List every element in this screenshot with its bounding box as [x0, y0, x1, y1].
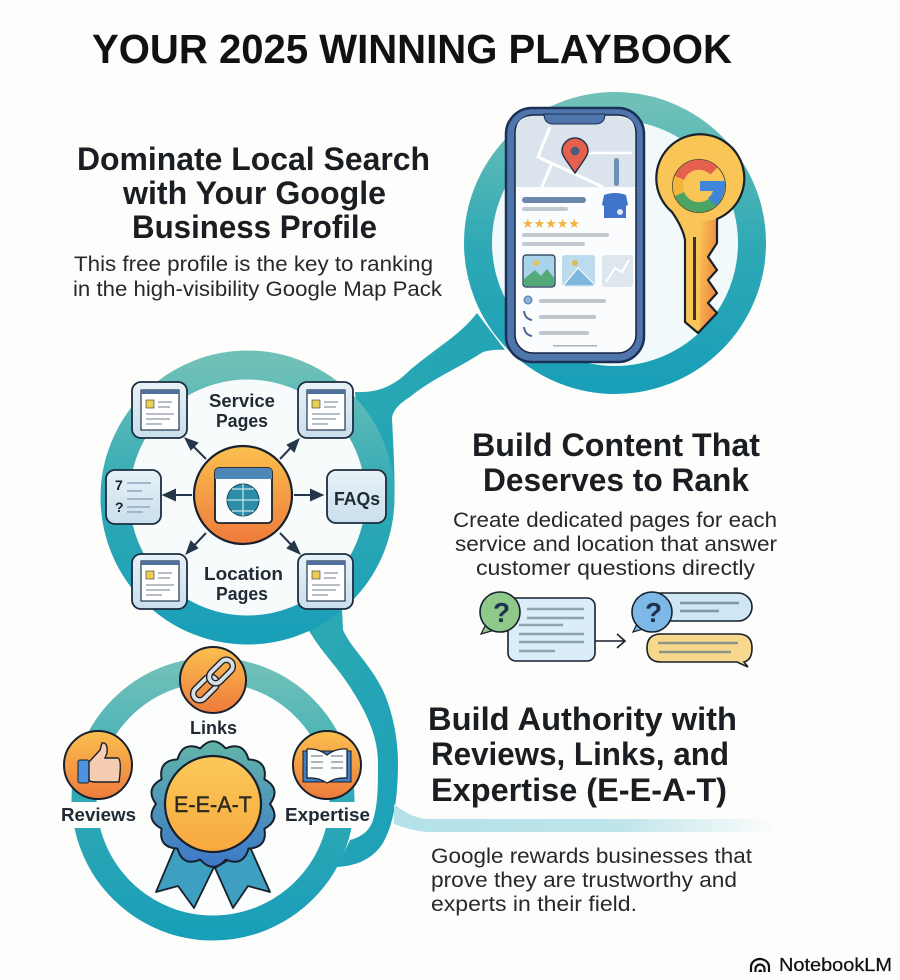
- question document: [480, 592, 595, 661]
- panel: middle ring content hub: [106, 365, 386, 630]
- text: content description: customer questions directly: [476, 557, 756, 580]
- icon: links badge: [180, 647, 246, 713]
- icon: storefront: [602, 193, 628, 218]
- label: location pages: Pages: [216, 584, 268, 604]
- listing text lines: [522, 197, 609, 246]
- phone notch: [544, 114, 605, 124]
- contact rows: [524, 296, 606, 346]
- icon: E-E-A-T rosette: E-E-A-T: [174, 792, 252, 817]
- icon: smartphone with business profile: [506, 108, 644, 362]
- icon: expertise book: [293, 731, 361, 799]
- heading: build authority: [428, 701, 737, 808]
- heading: dominate local search: Business Profile: [132, 209, 377, 245]
- heading: build content: Deserves to Rank: [483, 462, 749, 498]
- answer bubbles: ?: [645, 597, 662, 628]
- decorative band under authority heading: [394, 804, 775, 832]
- icon: FAQs card: [327, 470, 386, 523]
- photo thumbnails: [523, 255, 633, 287]
- text: profile description: in the high-visibility Google Map Pack: [73, 278, 443, 301]
- icon: question card left: ?: [115, 499, 124, 515]
- text: authority description: [431, 845, 752, 916]
- icon: page card top right: [298, 382, 353, 438]
- NotebookLM logo mark: [751, 959, 769, 972]
- icon: question page to answer chat: [480, 592, 752, 667]
- label: service pages: Pages: [216, 411, 268, 431]
- arrow: [595, 634, 625, 648]
- icon: central hub with browser globe: [194, 446, 292, 544]
- map area: [516, 116, 635, 187]
- label: service pages: [209, 391, 275, 431]
- answer bubbles: [632, 592, 752, 667]
- icon: FAQs card: FAQs: [334, 489, 380, 509]
- heading: build content: Build Content That: [472, 427, 760, 463]
- ribbons: [156, 847, 215, 908]
- text: authority description: prove they are trustworthy and: [431, 869, 737, 892]
- icon: reviews thumbs up: [64, 731, 132, 799]
- heading: dominate local search: with Your Google: [122, 175, 386, 211]
- text: profile description: [73, 253, 443, 301]
- icon: page card bottom left: [132, 554, 187, 609]
- connector: middle ring to lower ring: [305, 608, 398, 867]
- text: content description: service and location that answer: [455, 533, 777, 556]
- label: expertise: Expertise: [285, 805, 370, 825]
- text: profile description: This free profile is the key to ranking: [74, 253, 433, 276]
- icon: golden key with G: [656, 134, 744, 333]
- heading: dominate local search: [77, 141, 430, 245]
- heading: dominate local search: Dominate Local Search: [77, 141, 430, 177]
- icon: question card left: 7: [115, 477, 123, 493]
- rating stars: ★★★★★: [522, 216, 580, 231]
- panel: lower ring E-E-A-T: [60, 647, 370, 928]
- title: YOUR 2025 WINNING PLAYBOOK: [92, 26, 732, 72]
- text: content description: [453, 509, 777, 580]
- text: authority description: experts in their field.: [431, 893, 637, 916]
- text: content description: Create dedicated pages for each: [453, 509, 777, 532]
- heading: build authority: Reviews, Links, and: [431, 736, 729, 772]
- arrows from hub: [164, 439, 322, 553]
- question document: ?: [493, 597, 510, 628]
- label: service pages: Service: [209, 391, 275, 411]
- icon: page card top left: [132, 382, 187, 438]
- panel: top ring with phone and key: [478, 106, 752, 380]
- label: links: Links: [190, 718, 237, 738]
- icon: page card bottom right: [298, 554, 353, 609]
- icon: map pin: [562, 138, 588, 173]
- connector: top ring to middle ring: [355, 313, 505, 497]
- icon: question card left: [106, 470, 161, 524]
- label: reviews: Reviews: [61, 805, 136, 825]
- icon: E-E-A-T rosette: [151, 741, 275, 908]
- heading: build authority: Build Authority with: [428, 701, 737, 737]
- NotebookLM wordmark: NotebookLM: [779, 955, 892, 975]
- label: location pages: Location: [204, 564, 283, 584]
- text: authority description: Google rewards businesses that: [431, 845, 752, 868]
- label: location pages: [204, 564, 283, 604]
- heading: build content: [472, 427, 760, 498]
- heading: build authority: Expertise (E-E-A-T): [431, 772, 727, 808]
